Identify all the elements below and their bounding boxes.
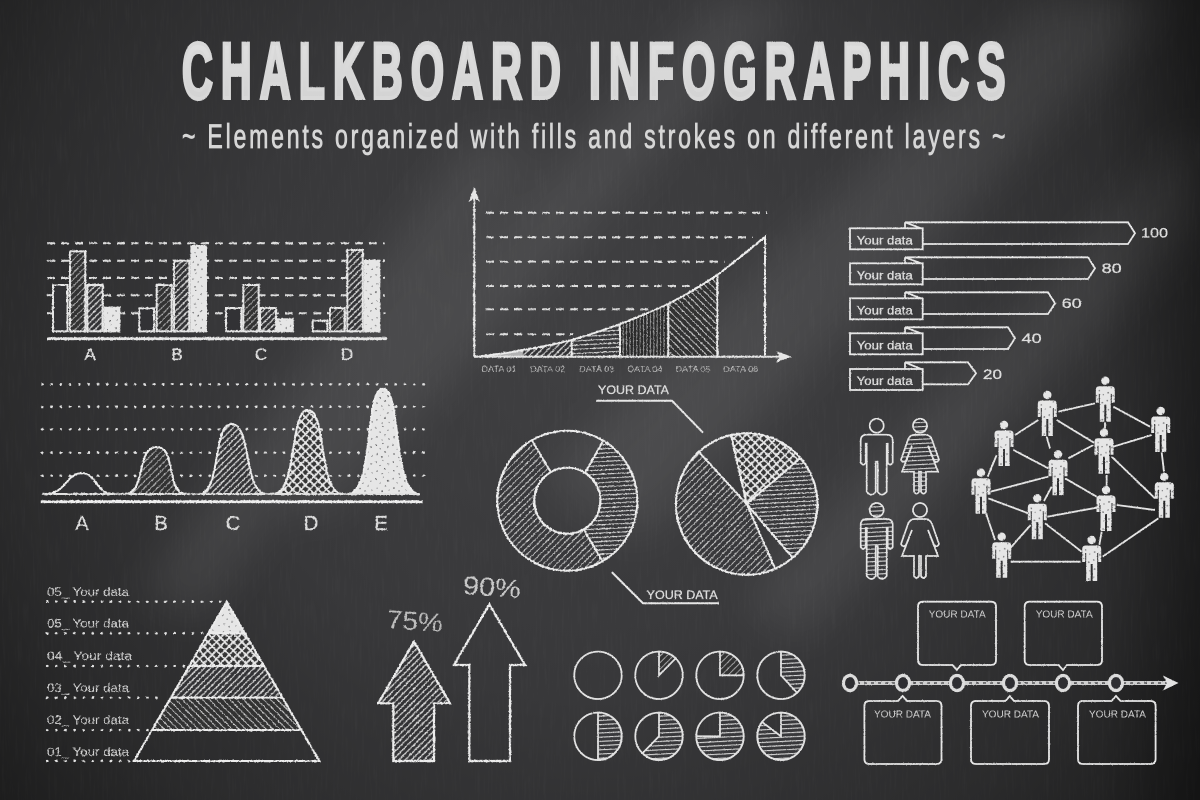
network of people xyxy=(972,376,1174,581)
pie 4 xyxy=(757,652,805,699)
x-axis labels xyxy=(482,365,759,374)
axis labels: C xyxy=(255,345,267,364)
upper box 1: YOUR DATA xyxy=(929,608,986,620)
callout: donut label: YOUR DATA xyxy=(647,588,718,602)
axis labels xyxy=(84,345,353,364)
x-axis labels: DATA 03 xyxy=(579,365,615,374)
lower box 1: YOUR DATA xyxy=(874,708,931,720)
callout boxes xyxy=(864,602,1156,764)
bars: group A xyxy=(53,251,119,331)
x-axis labels: DATA 04 xyxy=(628,365,663,374)
bar 60: 60 xyxy=(1062,296,1082,311)
shaded segments xyxy=(474,275,717,357)
curve line and dividers xyxy=(474,237,765,357)
bar 40 xyxy=(850,327,1042,354)
bars: group B xyxy=(139,246,206,331)
pie 7 xyxy=(696,713,744,760)
bar 80: Your data xyxy=(857,268,913,282)
axis labels: B xyxy=(171,345,183,364)
panel: curve area chart xyxy=(468,187,792,374)
panel: grouped bar chart xyxy=(47,243,387,364)
icon: male hatched xyxy=(861,503,893,579)
pyramid labels: 05_ Your data xyxy=(47,587,130,599)
panel: horizontal arrow bars xyxy=(850,222,1168,390)
axis labels: D xyxy=(304,513,318,535)
panel: bell curve chart xyxy=(41,384,426,535)
axis labels: A xyxy=(75,513,89,535)
arrow 75 percent xyxy=(378,604,450,761)
pyramid labels: 03_ Your data xyxy=(47,683,130,695)
pie 2 xyxy=(635,652,683,699)
lower box 3: YOUR DATA xyxy=(1089,708,1146,720)
x-axis labels: DATA 02 xyxy=(530,365,566,374)
upper box 2: YOUR DATA xyxy=(1036,608,1093,620)
x-axis labels: DATA 05 xyxy=(676,365,711,374)
bell curves xyxy=(45,389,420,494)
bar 80: 80 xyxy=(1102,261,1122,276)
panel: pyramid xyxy=(47,587,319,761)
axis labels: A xyxy=(84,345,96,364)
people icons xyxy=(861,419,939,579)
bar 40: Your data xyxy=(857,338,913,352)
icon: female hatched xyxy=(901,419,939,494)
pyramid labels: 05_ Your data xyxy=(47,619,130,631)
title: CHALKBOARD INFOGRAPHICS xyxy=(182,28,1006,115)
panel: timeline xyxy=(844,602,1178,764)
lower box 3 xyxy=(1078,696,1156,764)
x-axis labels: DATA 06 xyxy=(723,365,759,374)
lower box 1 xyxy=(864,696,942,764)
bars: group C xyxy=(226,285,293,331)
axis labels xyxy=(75,513,388,535)
bar 100: 100 xyxy=(1141,226,1168,240)
icon: male outline xyxy=(861,419,893,495)
bar 100 xyxy=(850,222,1168,249)
axis labels: B xyxy=(154,513,168,535)
bar 20 xyxy=(850,362,1002,390)
lower box 2 xyxy=(971,696,1049,764)
pie 8 xyxy=(757,713,805,760)
callout: pie label xyxy=(596,383,703,433)
callout: pie label: YOUR DATA xyxy=(598,383,669,397)
pyramid layers xyxy=(134,602,319,761)
people nodes xyxy=(972,376,1174,581)
bar 20: 20 xyxy=(983,367,1002,382)
pie 5 xyxy=(574,713,622,760)
bar 40: 40 xyxy=(1022,331,1042,346)
axis labels: D xyxy=(341,345,353,364)
pyramid labels: 02_ Your data xyxy=(47,715,130,727)
axes xyxy=(468,187,792,362)
axis labels: C xyxy=(226,513,240,535)
bars: group D xyxy=(313,250,379,331)
x-axis labels: DATA 01 xyxy=(482,365,517,374)
bar 60: Your data xyxy=(857,303,913,317)
timeline arrow xyxy=(850,676,1178,690)
donut chart xyxy=(497,431,637,571)
pyramid labels: 01_ Your data xyxy=(47,747,130,759)
pyramid labels: 04_ Your data xyxy=(47,651,133,663)
bar 20: Your data xyxy=(857,374,913,388)
axis labels: E xyxy=(374,513,388,535)
pie 1 xyxy=(574,652,622,699)
icon: female outline xyxy=(901,503,939,578)
pyramid labels xyxy=(47,587,133,759)
bar 100: Your data xyxy=(857,233,913,247)
pie 6 xyxy=(635,713,683,760)
small pie series xyxy=(574,652,805,760)
lower box 2: YOUR DATA xyxy=(982,708,1039,720)
bar 60 xyxy=(850,292,1082,319)
bar 80 xyxy=(850,257,1122,284)
arrow 90 percent: 90% xyxy=(462,570,522,604)
callout: donut label xyxy=(612,572,719,603)
arrow 90 percent xyxy=(454,570,525,761)
pie chart xyxy=(676,433,817,575)
timeline nodes xyxy=(844,676,1122,690)
pie 3 xyxy=(696,652,744,699)
connecting lines xyxy=(986,403,1164,562)
arrow 75 percent: 75% xyxy=(386,604,444,638)
upper box 2 xyxy=(1025,602,1102,670)
upper box 1 xyxy=(918,602,996,670)
subtitle: ~ Elements organized with fills and strokes on different layers ~ xyxy=(182,119,1005,156)
